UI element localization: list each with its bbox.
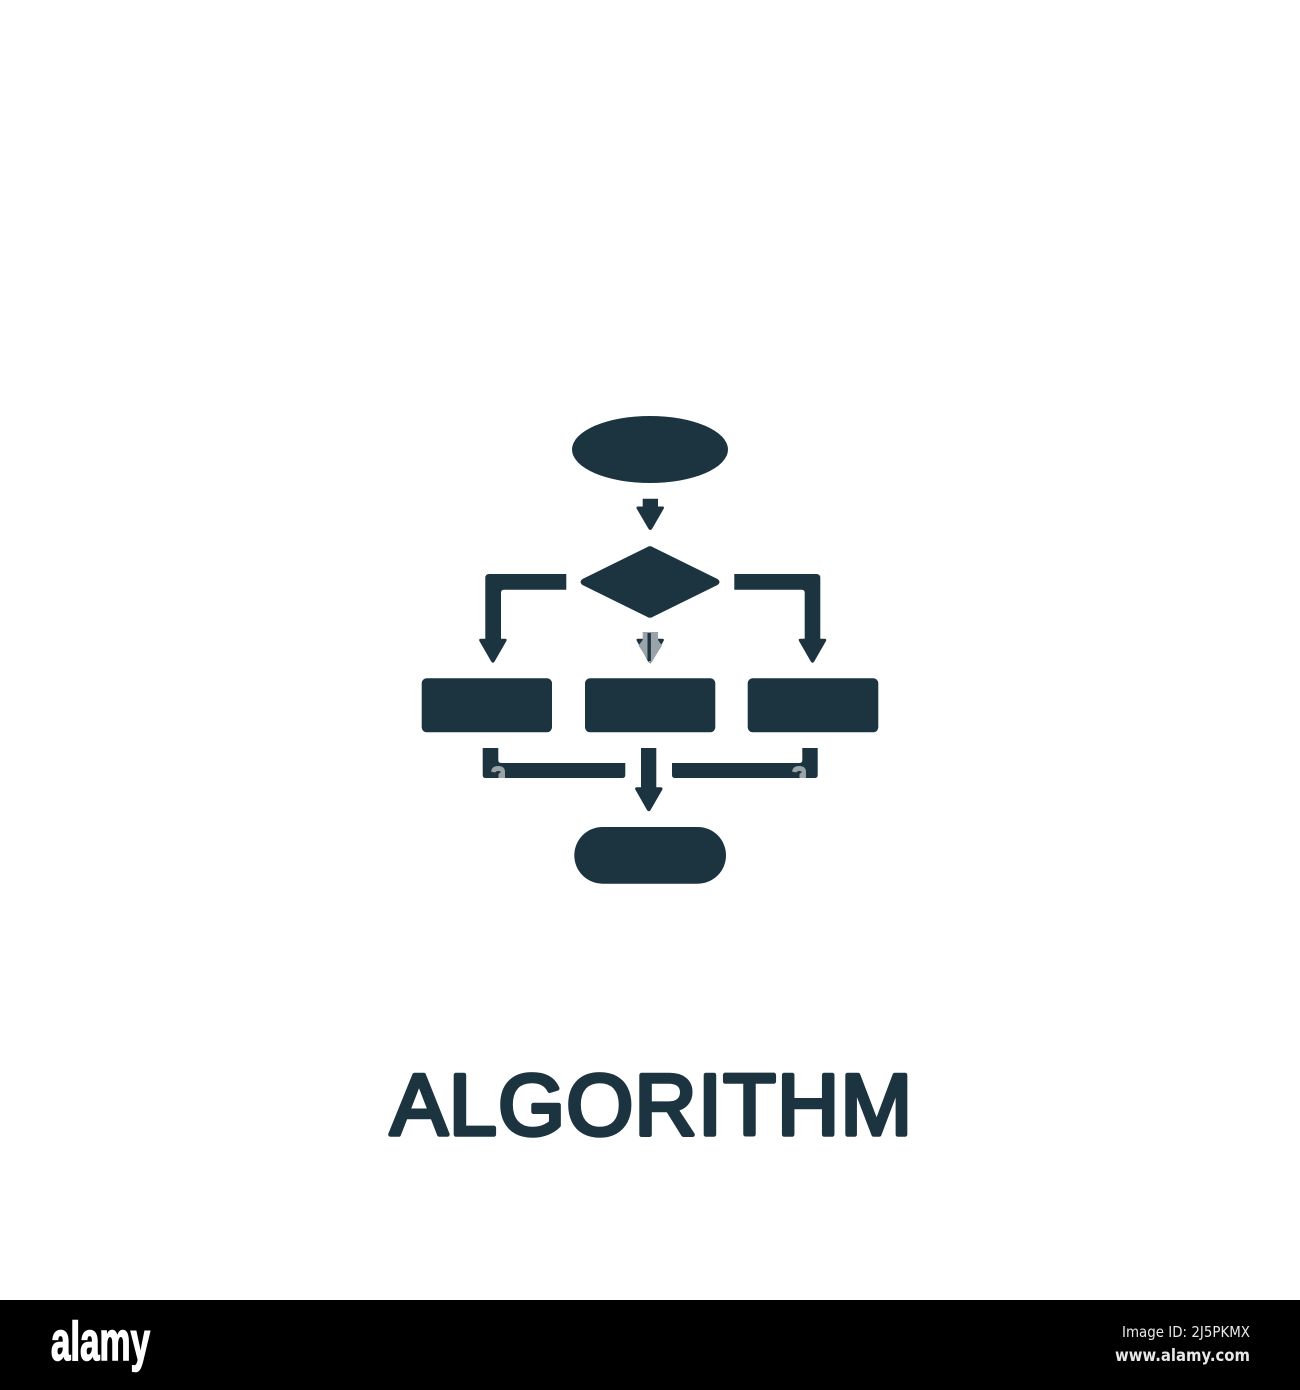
connector: left process to end xyxy=(483,748,625,778)
arrow: start to decision xyxy=(636,499,664,530)
arrow: decision to middle process xyxy=(636,632,664,664)
arrow: decision to right process xyxy=(734,574,826,663)
arrow: decision to left process xyxy=(479,574,566,663)
left process box xyxy=(422,678,552,732)
end terminator pill xyxy=(574,827,726,884)
middle process box xyxy=(585,678,715,732)
footer bar xyxy=(0,1300,1300,1390)
website: www.alamy.com xyxy=(1115,1346,1250,1366)
decision diamond xyxy=(581,546,720,618)
arrow: middle process to end xyxy=(635,748,663,811)
logo: alamy: alamy xyxy=(51,1310,150,1372)
start ellipse xyxy=(572,416,728,483)
right process box xyxy=(748,678,878,732)
connector: right process to end xyxy=(672,748,818,778)
image id: Image ID: 2J5PKMX xyxy=(1122,1323,1250,1341)
icon: algorithm flowchart xyxy=(422,416,878,884)
title: ALGORITHM: ALGORITHM xyxy=(390,1058,912,1154)
